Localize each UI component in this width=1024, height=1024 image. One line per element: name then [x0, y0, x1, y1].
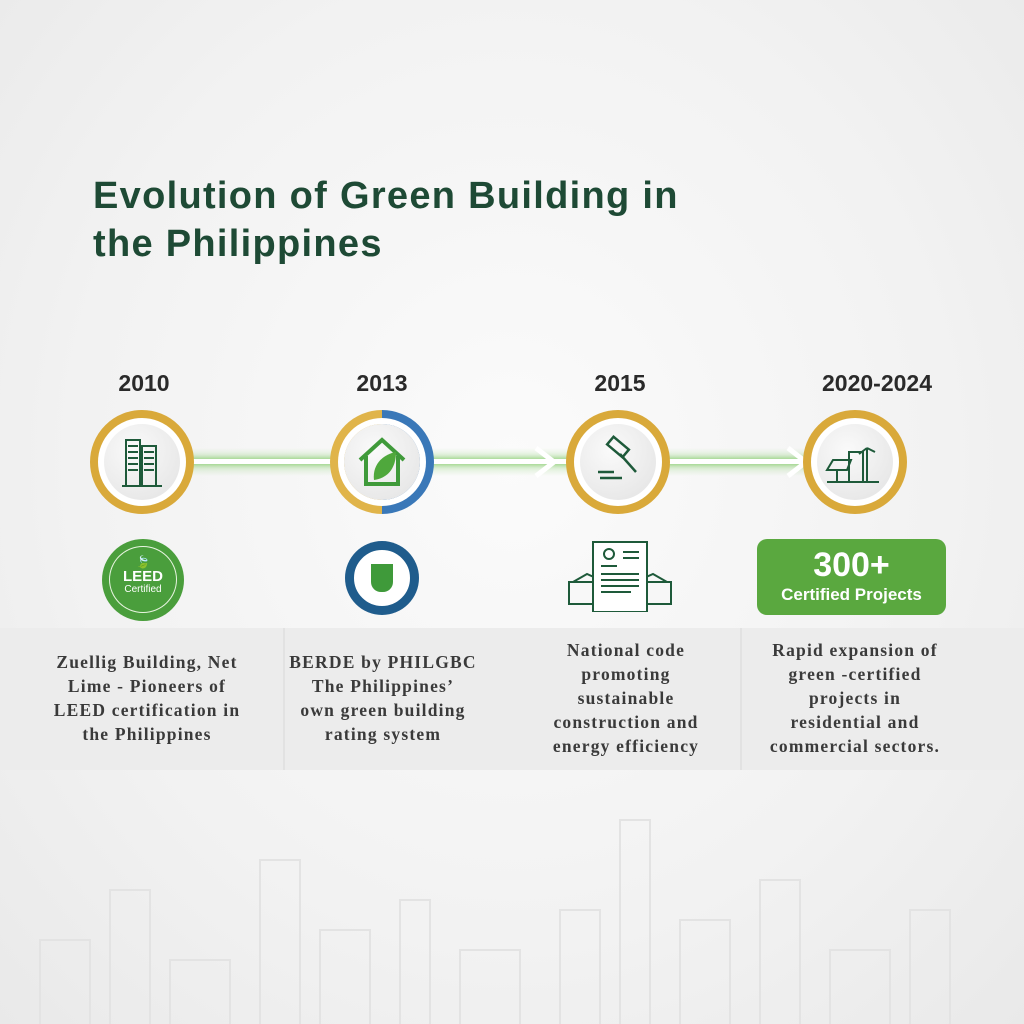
text 2020: residential and [790, 712, 920, 732]
text 2013: BERDE by PHILGBC [289, 652, 477, 672]
title: the Philippines [93, 223, 383, 265]
timeline line [140, 448, 860, 476]
document icon [568, 541, 672, 612]
text 2013: own green building [300, 700, 466, 720]
text band [0, 628, 1024, 770]
year 2013: 2013 [356, 370, 408, 396]
circle 2020 [803, 410, 907, 514]
year 2010: 2010 [118, 370, 170, 396]
text 2010: Lime - Pioneers of [68, 676, 226, 696]
LEED badge [105, 542, 181, 618]
LEED badge: LEED [123, 568, 163, 585]
LEED badge: 🍃 [136, 555, 150, 569]
text 2013 [289, 652, 477, 744]
background skyline [39, 819, 951, 1024]
circle 2013 [330, 410, 434, 514]
circle 2010 [90, 410, 194, 514]
year 2020-2024: 2020-2024 [822, 370, 932, 396]
title: Evolution of Green Building in [93, 175, 679, 217]
text 2020: commercial sectors. [770, 736, 940, 756]
300+ box [757, 539, 946, 615]
text 2010: Zuellig Building, Net [56, 652, 238, 672]
text 2020: Rapid expansion of [772, 640, 938, 660]
text 2010: the Philippines [82, 724, 212, 744]
text 2020: green -certified [788, 664, 922, 684]
text 2015: promoting [581, 664, 671, 684]
arrow 1 [535, 449, 556, 475]
text 2013: The Philippines’ [312, 676, 454, 696]
text 2015: energy efficiency [553, 736, 699, 756]
LEED badge: Certified [124, 584, 162, 595]
text 2015 [553, 640, 699, 756]
text 2015: sustainable [578, 688, 674, 708]
text 2015: National code [567, 640, 685, 660]
BERDE seal [345, 541, 419, 615]
text 2010 [54, 652, 240, 744]
arrow 2 [786, 446, 804, 478]
title [93, 175, 679, 265]
circle 2015 [566, 410, 670, 514]
text 2015: construction and [553, 712, 699, 732]
text 2013: rating system [325, 724, 441, 744]
year 2015: 2015 [594, 370, 646, 396]
text 2010: LEED certification in [54, 700, 240, 720]
300+ box: Certified Projects [781, 585, 922, 604]
text 2020: projects in [809, 688, 901, 708]
300+ box: 300+ [813, 546, 890, 584]
text 2020 [770, 640, 940, 756]
